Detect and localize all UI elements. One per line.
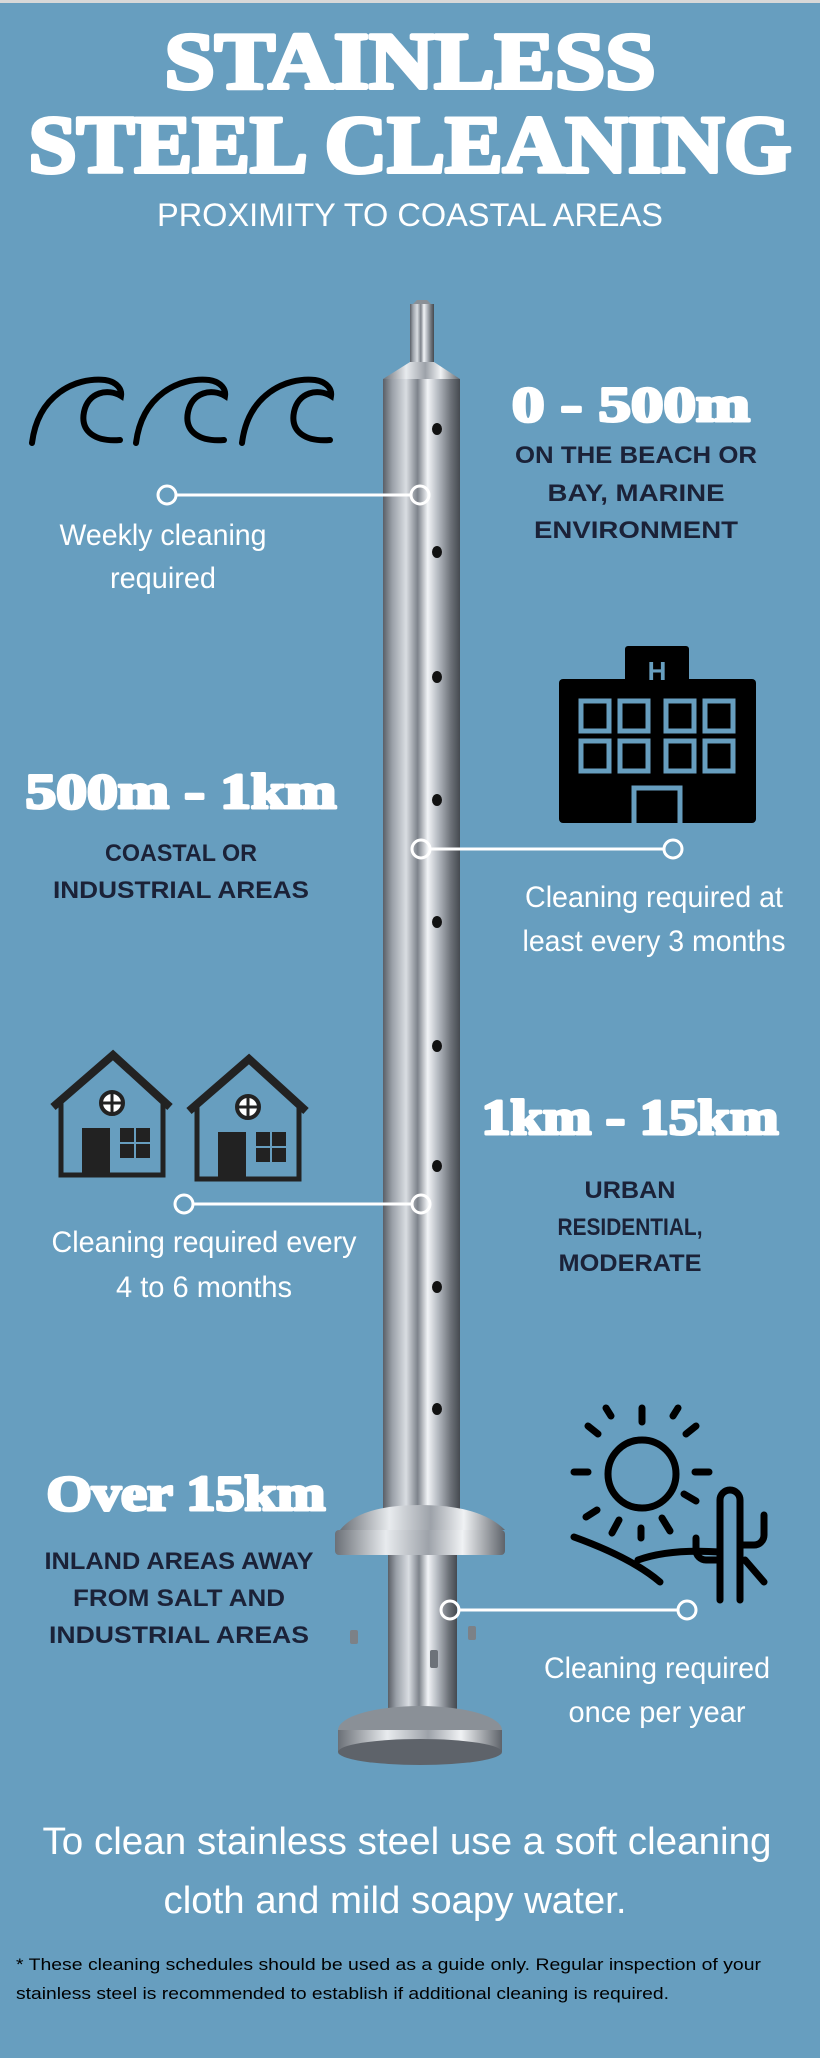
text: 3 months: least every 3 months xyxy=(522,925,786,958)
icon: hospital xyxy=(559,646,756,823)
title: STAINLESS xyxy=(164,18,656,106)
text: coastal xyxy=(53,840,309,904)
text: cleaning tip: To clean stainless steel use a soft cleaning xyxy=(42,1821,771,1863)
text: weekly cleaning: Weekly cleaning xyxy=(60,519,266,552)
text: urban: RESIDENTIAL, xyxy=(558,1214,702,1241)
text: cleaning tip: cloth and mild soapy water. xyxy=(164,1880,626,1922)
text: 3 months xyxy=(522,881,786,958)
text: inland: INDUSTRIAL AREAS xyxy=(49,1622,309,1649)
text: once per year: Cleaning required xyxy=(544,1652,770,1685)
text: beach: BAY, MARINE xyxy=(548,480,724,507)
connector 3 xyxy=(175,1195,430,1213)
text: 3 months: Cleaning required at xyxy=(525,881,784,914)
connector 1 xyxy=(158,486,429,504)
text: urban xyxy=(558,1177,702,1277)
footnote xyxy=(16,1955,761,2003)
text: urban: MODERATE xyxy=(558,1250,702,1277)
title xyxy=(28,18,792,190)
icon: hospital: H xyxy=(648,656,666,686)
subtitle: PROXIMITY TO COASTAL AREAS xyxy=(157,197,663,233)
steel post xyxy=(335,300,505,1765)
icon: waves xyxy=(32,380,331,443)
text: inland xyxy=(44,1548,314,1649)
footnote: stainless steel is recommended to establish if additional cleaning is required. xyxy=(16,1984,669,2003)
text: beach xyxy=(515,442,757,544)
icon: sun and cactus xyxy=(574,1408,764,1600)
text: inland: INLAND AREAS AWAY xyxy=(44,1548,314,1575)
heading: 500m - 1km: 500m - 1km xyxy=(26,763,336,819)
text: coastal: INDUSTRIAL AREAS xyxy=(53,877,309,904)
heading: over 15km: Over 15km xyxy=(46,1465,326,1521)
text: weekly cleaning xyxy=(60,519,266,595)
text: once per year xyxy=(544,1652,770,1729)
heading: 0 - 500m: 0 - 500m xyxy=(512,376,750,432)
connector 2 xyxy=(412,840,682,858)
text: once per year: once per year xyxy=(568,1696,746,1729)
text: weekly cleaning: required xyxy=(110,562,216,595)
text: 4 to 6 months xyxy=(52,1226,356,1304)
text: beach: ON THE BEACH OR xyxy=(515,442,757,469)
connector 4 xyxy=(441,1601,696,1619)
text: inland: FROM SALT AND xyxy=(73,1585,285,1612)
heading: 1km - 15km: 1km - 15km xyxy=(482,1089,778,1145)
text: 4 to 6 months: 4 to 6 months xyxy=(116,1271,292,1304)
text: urban: URBAN xyxy=(584,1177,676,1204)
text: cleaning tip xyxy=(42,1821,771,1922)
text: coastal: COASTAL OR xyxy=(105,840,257,867)
footnote: * These cleaning schedules should be used as a guide only. Regular inspection of your xyxy=(16,1955,761,1974)
title: STEEL CLEANING xyxy=(28,99,792,190)
text: 4 to 6 months: Cleaning required every xyxy=(52,1226,356,1259)
text: beach: ENVIRONMENT xyxy=(534,517,738,544)
icon: houses xyxy=(53,1055,306,1179)
